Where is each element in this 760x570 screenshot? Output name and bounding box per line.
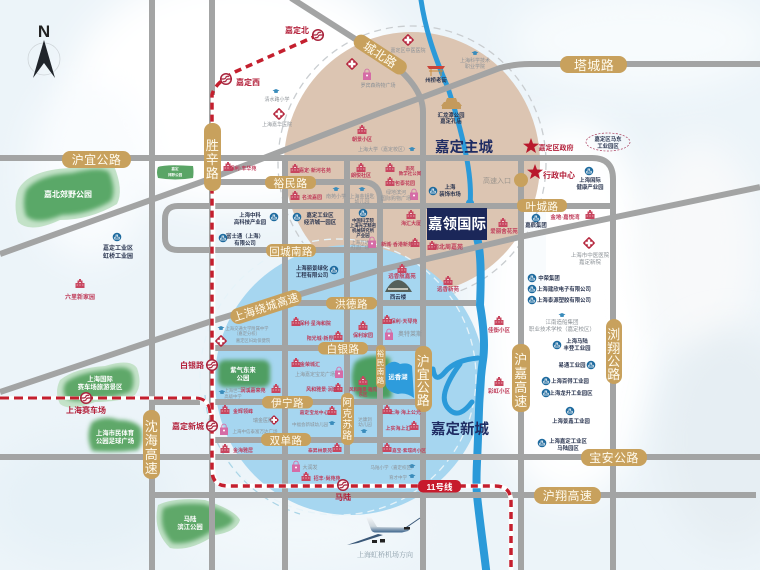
landmark: 汇龙潭公园 嘉定孔庙: 汇龙潭公园 <box>438 111 464 119</box>
industrial park labels: 经济城一园区 <box>304 218 337 226</box>
park: 上海市民体育公园足球广场: 公园足球广场 <box>96 436 135 445</box>
pink residential labels: 保利·星海和院 <box>299 320 331 327</box>
grey place labels: 奥特莱斯 <box>398 330 422 338</box>
park: 马陆滨江公园: 马陆 <box>184 514 197 523</box>
grey place labels: 马陆小学（嘉定校区） <box>370 464 416 471</box>
district title: 嘉定新城: 嘉定新城 <box>431 420 489 438</box>
grey place labels: 幼儿园 <box>354 198 370 205</box>
grey place labels: 嘉定区中医医院 <box>390 47 426 54</box>
grey place labels: 上海嘉华医院 <box>262 121 292 128</box>
grey place labels: 大润发 <box>302 464 318 471</box>
park: 上海国际赛车场旅游景区: 赛车场旅游景区 <box>78 382 123 391</box>
grey place labels: 嘉定新院 <box>579 258 601 266</box>
road label: 沪翔高速: 沪翔高速 <box>543 488 592 503</box>
grey place labels: 职业技术学校（嘉定校区） <box>529 325 595 333</box>
pink residential labels: 风和雅景·润城 <box>306 386 338 393</box>
project box: 嘉领国际: 嘉领国际 <box>428 216 486 233</box>
road label: 阿克苏路: 克 <box>342 408 353 420</box>
road label: 洪德路: 洪德路 <box>335 298 368 310</box>
pink residential labels: 润溪嘉来苑 <box>240 387 266 394</box>
road label: 浏翔公路: 翔 <box>607 341 621 356</box>
road label: 沪嘉高速: 嘉 <box>514 366 528 381</box>
road label: 上海绕城高速: 上海绕城高速 <box>231 290 301 324</box>
pink residential labels: 朝景小区 <box>352 136 372 143</box>
grey place labels: 打造广场 <box>351 244 369 251</box>
grey place labels: 上海交通大学附属中学 <box>226 325 269 332</box>
grey place labels: 江南造船集团 <box>545 318 579 326</box>
landmark: 嘉定区政府 <box>523 138 574 153</box>
pink residential labels: 招丰·尚苑苑 <box>314 475 340 482</box>
industrial park labels: 上海 <box>445 183 456 191</box>
road label: 沪嘉高速: 沪 <box>514 352 528 367</box>
road label: 浏翔公路: 路 <box>607 367 621 382</box>
park: 嘉定郊野公园 small <box>157 165 194 180</box>
industrial park labels: 上海光学精密 <box>350 222 377 229</box>
road label: 裕民南路: 路 <box>377 375 385 385</box>
industrial park labels: 高科技产业园 <box>234 218 266 226</box>
landmark: 行政中心 <box>527 164 575 180</box>
shopping bags <box>220 69 418 472</box>
grey place labels: 上海万达 <box>351 239 369 246</box>
road label: 双单路: 双单路 <box>270 434 302 447</box>
industrial park labels: 上海景鑫工业园 <box>552 417 590 425</box>
station: 嘉定西 <box>221 74 260 87</box>
grey place labels: 上海市中医医院 <box>571 251 610 259</box>
industrial park labels: 嘉定工业区 <box>103 244 133 252</box>
park: 上海国际赛车场旅游景区 <box>57 362 140 408</box>
landmark: 行政中心: 行政中心 <box>543 170 575 180</box>
road label: 宝安公路: 宝安公路 <box>589 450 639 465</box>
zone: 嘉定主城 tan circle <box>278 26 546 300</box>
zone: 嘉定新城 blue circle <box>200 239 485 515</box>
industrial park labels: 丰登工业园 <box>564 344 590 352</box>
park: 紫气东来公园 <box>218 360 270 387</box>
pink residential labels: 爱丽舍花苑 <box>490 227 518 235</box>
grey place labels: 嘉定区妇幼保健院 <box>236 337 271 344</box>
pink residential labels: 上海·海上公元 <box>389 409 421 416</box>
park: 嘉北郊野公园: 嘉北郊野公园 <box>44 189 92 199</box>
industrial park labels: 上海马陆 <box>566 337 588 345</box>
road label: 白银路: 白银路 <box>327 342 359 356</box>
landmark: 州桥老街 <box>425 66 447 84</box>
grey place labels: 育才中学 <box>389 474 407 481</box>
grey place labels: 清水路小学 <box>264 96 290 103</box>
park: 紫气东来公园: 紫气东来 <box>230 365 256 374</box>
grey place labels: （嘉定分校） <box>234 330 260 337</box>
road label: 裕民南路: 南 <box>377 366 385 376</box>
metro line 11 <box>0 35 511 570</box>
pink residential labels: 南北周嘉苑 <box>433 243 463 251</box>
road label: 胜辛路: 路 <box>206 166 219 181</box>
landmark: 汇龙潭公园 嘉定孔庙 <box>438 98 464 125</box>
grey place labels: 瑞金医院 <box>253 417 273 424</box>
road label: 阿克苏路: 阿 <box>342 397 353 409</box>
industrial park labels: 健康产业园 <box>577 183 603 191</box>
industrial park labels: 上海泰源塑胶有限公司 <box>537 296 591 304</box>
road label: 沪宜公路 vertical <box>415 346 432 412</box>
project box: 嘉领国际 <box>427 208 487 240</box>
grey place labels: 中福会新城幼儿园 <box>292 421 328 428</box>
road label: 叶城路: 叶城路 <box>526 200 558 213</box>
station: 上海赛车场: 上海赛车场 <box>66 405 106 415</box>
industrial park labels: 嘉辰集团 <box>525 221 547 229</box>
grey place labels: 南苑小学 <box>326 193 346 200</box>
road label: 裕民路: 裕民路 <box>273 177 308 190</box>
park and lake: 远香湖: 远香湖 <box>388 372 408 381</box>
station: 嘉定新城: 嘉定新城 <box>172 421 204 431</box>
landmark: 西云楼 <box>385 280 412 301</box>
pink residential labels: 六里新家园 <box>65 293 95 301</box>
industrial zone: 嘉定区马东工业园区: 嘉定区马东 <box>595 135 622 143</box>
road label: 沈海高速: 沈 <box>145 419 158 434</box>
industrial park labels: 上海龙升工业园区 <box>549 389 593 397</box>
station: 马陆: 马陆 <box>335 492 351 502</box>
road label: 塔城路 <box>560 56 627 73</box>
industrial zone: 嘉定区马东工业园区: 工业园区 <box>597 142 619 150</box>
landmark: 汇龙潭公园 嘉定孔庙: 嘉定孔庙 <box>440 117 462 125</box>
industrial park labels: 上海中科 <box>239 211 261 219</box>
pink residential labels: 风和雅景·雅苑 <box>349 386 378 393</box>
road label: 阿克苏路: 路 <box>342 429 353 442</box>
grey place labels: 上海世二 <box>224 387 242 394</box>
pink residential labels: 嘉宝·紫瑞尚小区 <box>392 447 426 454</box>
grey place labels: 国际购物广场 <box>381 195 411 202</box>
road label: 沪翔高速 <box>534 487 601 504</box>
grey place labels: 幼儿园 <box>358 421 372 428</box>
station: 嘉定北 <box>285 25 323 40</box>
road label: 胜辛路: 胜 <box>206 138 219 153</box>
road label: 裕民南路: 裕 <box>377 348 385 358</box>
road label: 沈海高速: 高 <box>145 447 158 462</box>
road label: 沈海高速: 海 <box>145 433 158 448</box>
pink residential labels: 佳衡小区 <box>488 326 510 334</box>
road label: 浏翔公路 <box>606 319 622 384</box>
station: 白银路 <box>180 360 217 370</box>
road label: 沪嘉高速 <box>512 344 530 412</box>
grey place labels: 上海科学技术 <box>460 57 490 64</box>
pink residential labels: 教学社公寓 <box>399 170 422 177</box>
river: 横沥河 <box>421 0 487 570</box>
industrial park labels: 有限公司 <box>234 239 256 247</box>
grey place labels: 上海大学（嘉定校区） <box>358 146 408 153</box>
pink residential labels: 阳光城·新界 <box>307 335 333 342</box>
compass: north arrow: N <box>38 22 50 41</box>
pink residential labels: 新城·香港新苑 <box>381 241 413 248</box>
road label: 沪宜公路 vertical: 路 <box>417 393 430 408</box>
park: 嘉定郊野公园 small: 嘉定 <box>171 166 179 171</box>
grey place labels: 职业学院 <box>465 63 485 70</box>
grey place labels: 罗宾森购物广场 <box>360 82 396 89</box>
station: 上海赛车场 <box>66 393 106 415</box>
industrial park labels: 富士通（上海） <box>226 232 264 240</box>
industrial park labels: 中荣集团 <box>538 274 560 282</box>
pink residential labels: 海汇大厦 <box>401 220 421 227</box>
grey place labels: 上海中信泰富万达广场 <box>232 428 278 435</box>
industrial park labels: 上海国际 <box>579 176 601 184</box>
industrial park labels: 上海嘉定工业区 <box>549 437 587 445</box>
road label: 伊宁路: 伊宁路 <box>271 396 304 410</box>
pink residential labels: 保利·丰华苑 <box>230 165 256 172</box>
grey place labels: 上海金钥匙 <box>349 193 375 200</box>
road label: 沪宜公路: 沪宜公路 <box>72 152 121 167</box>
pink residential labels: 彩虹小区 <box>488 387 510 395</box>
pink residential labels: 朗悦社区 <box>351 172 371 179</box>
pink residential labels: 远香航嘉苑 <box>388 272 416 280</box>
grey place labels: 高级中学 <box>224 393 242 400</box>
road label: 浏翔公路: 浏 <box>607 327 621 342</box>
residential buildings <box>76 125 594 481</box>
road label: 浏翔公路: 公 <box>607 354 621 369</box>
grey place labels: 绿地滨河 <box>386 189 406 196</box>
road label: 城北路: 城北路 <box>361 38 400 71</box>
road label: 沪宜公路 <box>62 151 131 168</box>
industrial zone: 嘉定区马东工业园区 <box>586 133 630 151</box>
pink residential labels: 金荣城汇 <box>300 361 320 368</box>
pink residential labels: 名流嘉园 <box>302 194 322 201</box>
pink residential labels: 包泰花园 <box>395 180 415 187</box>
road label: 沪宜公路 vertical: 宜 <box>417 367 430 382</box>
highway entrance <box>483 173 528 187</box>
road label: 沈海高速 <box>143 410 160 479</box>
industrial park labels: 机械研究所 <box>352 227 375 234</box>
park: 马陆滨江公园 <box>156 499 240 549</box>
pink residential labels: 泰昇林景苑 <box>308 447 332 454</box>
pink residential labels <box>65 136 580 482</box>
direction label: 上海虹桥机场方向: 上海虹桥机场方向 <box>357 550 413 559</box>
factory markers <box>113 167 595 447</box>
landmark: 西云楼: 西云楼 <box>390 293 407 301</box>
industrial park labels <box>103 176 603 452</box>
station: 嘉定新城 <box>172 421 217 431</box>
park: 嘉北郊野公园 <box>16 163 120 228</box>
road label: 沪宜公路 vertical: 公 <box>417 380 430 395</box>
road label: 阿克苏路: 苏 <box>342 418 353 431</box>
road label: 沪嘉高速: 高 <box>514 380 528 395</box>
industrial park labels: 易通工业园 <box>559 361 585 369</box>
compass: north arrow <box>28 22 60 78</box>
station: 白银路: 白银路 <box>180 360 204 370</box>
road label: 回城南路: 回城南路 <box>269 245 313 258</box>
park: 上海市民体育公园足球广场 <box>88 418 142 452</box>
highway entrance: 高速入口 <box>483 176 511 185</box>
airplane <box>347 517 420 545</box>
industrial park labels: 装饰市场 <box>439 190 461 198</box>
road label: 宝安公路 <box>581 449 647 466</box>
pink residential labels: 保利·天琴苑 <box>391 318 417 325</box>
industrial park labels: 上海百得工业园 <box>551 377 589 385</box>
pink residential labels: 远香新苑 <box>437 285 459 293</box>
pink residential labels: 金辉领峰 <box>233 408 253 415</box>
road label: 胜辛路: 辛 <box>206 152 219 167</box>
district title: 嘉定主城: 嘉定主城 <box>435 138 493 156</box>
school markers <box>218 51 566 478</box>
park: 嘉定郊野公园 small: 郊野公园 <box>168 172 183 177</box>
road label: 伊宁路 <box>262 396 313 410</box>
road label: 阿克苏路 <box>341 393 354 445</box>
park: 马陆滨江公园: 滨江公园 <box>177 522 203 531</box>
park: 紫气东来公园: 公园 <box>237 374 249 382</box>
road label: 沪宜公路 vertical: 沪 <box>417 354 430 369</box>
road label: 洪德路 <box>326 297 377 310</box>
park: 上海国际赛车场旅游景区: 上海国际 <box>87 374 113 383</box>
pink residential labels: 上实海上汇 <box>385 425 411 432</box>
landmark: 嘉定区政府: 嘉定区政府 <box>538 143 574 152</box>
landmark: 州桥老街: 州桥老街 <box>425 76 447 84</box>
pink residential labels: 嘉定·新河名苑 <box>299 167 331 174</box>
road label: 裕民路 <box>265 176 316 190</box>
pink residential labels: 保利家园 <box>353 332 373 339</box>
industrial park labels: 嘉定工业区 <box>307 211 334 219</box>
industrial park labels: 上海丽景绿化 <box>296 264 329 272</box>
road label: 叶城路 <box>517 199 567 213</box>
road label: 沪嘉高速: 速 <box>514 394 528 409</box>
industrial park labels: 上海建欣电子有限公司 <box>537 285 591 293</box>
grey place labels: 达康洞 <box>358 416 372 423</box>
road label: 裕民南路: 民 <box>377 358 385 367</box>
pink residential labels: 东区 <box>359 391 368 397</box>
park and lake: 远香湖 <box>352 356 414 400</box>
industrial park labels: 虹桥工业园 <box>103 252 133 260</box>
road label: 双单路 <box>261 433 311 447</box>
industrial park labels: 工程有限公司 <box>296 271 328 279</box>
pink residential labels: 嘉定宝龙中心 <box>300 409 329 416</box>
grey place labels: 上海嘉定宝龙广场 <box>295 371 335 378</box>
industrial park labels: 中国科学院 <box>352 217 375 224</box>
park: 上海市民体育公园足球广场: 上海市民体育 <box>96 428 135 437</box>
road label: 城北路 <box>351 32 410 77</box>
line label: 11号线 <box>418 480 461 492</box>
line label: 11号线: 11号线 <box>426 482 453 492</box>
hospitals <box>215 34 595 425</box>
pink residential labels: 金海雅居 <box>233 447 253 454</box>
station: 马陆 <box>335 480 351 502</box>
station: 嘉定西: 嘉定西 <box>236 77 260 87</box>
pink residential labels: 金地·嘉悦湾 <box>550 213 580 221</box>
grey place labels <box>224 47 610 481</box>
station: 嘉定北: 嘉定北 <box>285 25 309 35</box>
road label: 裕民南路 <box>376 345 386 388</box>
road label: 沈海高速: 速 <box>145 461 158 476</box>
road label: 胜辛路 <box>204 123 221 191</box>
road label: 塔城路: 塔城路 <box>574 58 614 73</box>
road label: 白银路 <box>318 342 368 356</box>
industrial park labels: 产业园 <box>356 232 370 239</box>
pink residential labels: 南苑 <box>406 165 415 172</box>
industrial park labels: 马陆园区 <box>557 444 579 452</box>
